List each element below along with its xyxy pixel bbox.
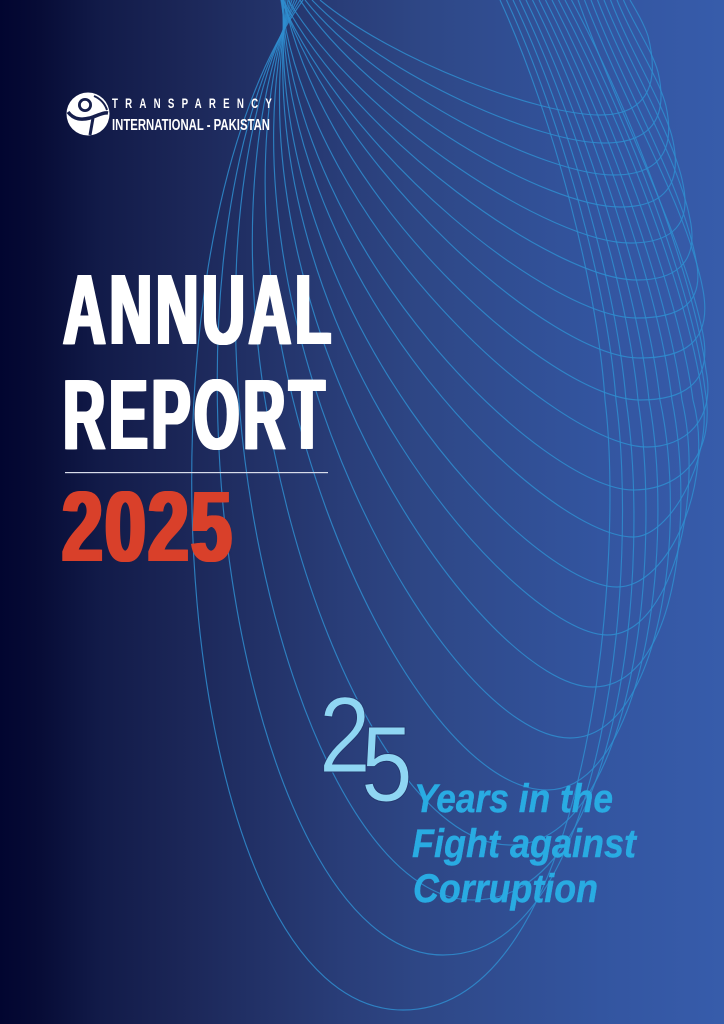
logo text line 1: TRANSPARENCY (112, 97, 272, 111)
tagline: Corruption (413, 867, 598, 911)
anniversary numeral 25: 5 (361, 704, 413, 825)
tagline (412, 777, 638, 911)
title divider (65, 472, 328, 473)
anniversary numeral 25 (319, 675, 413, 825)
icon: globe with figure (66, 92, 110, 136)
wireframe loop pattern (192, 0, 708, 1010)
logo text line 2: INTERNATIONAL - PAKISTAN (112, 117, 270, 134)
title: ANNUAL: ANNUAL (63, 254, 335, 366)
logo: Transparency International Pakistan (66, 92, 272, 136)
title: REPORT: REPORT (62, 359, 328, 471)
tagline: Fight against (412, 822, 638, 866)
tagline: Years in the (414, 777, 613, 821)
anniversary numeral 25: 2 (319, 675, 371, 796)
year: 2025: 2025 (62, 471, 234, 583)
